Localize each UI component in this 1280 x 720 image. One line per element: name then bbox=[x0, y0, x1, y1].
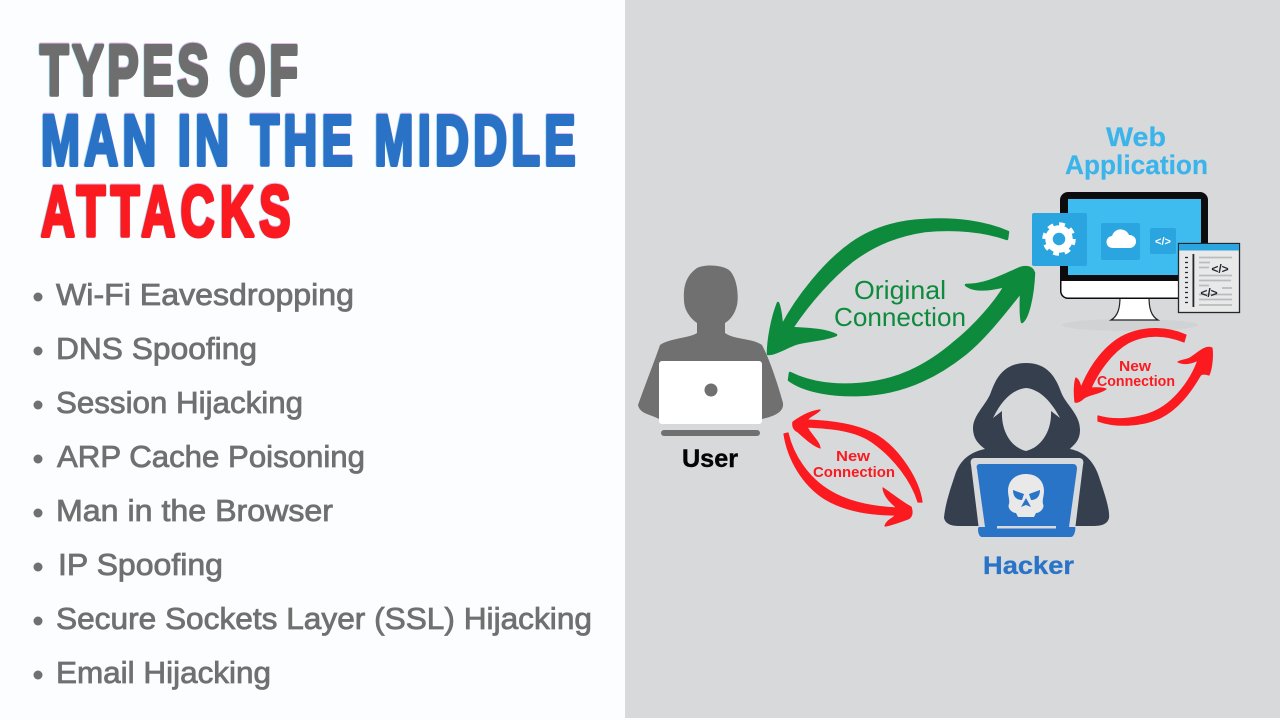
list of attack types: Session Hijacking bbox=[56, 385, 303, 420]
heading: web application: Application bbox=[1065, 150, 1208, 180]
list of attack types: Secure Sockets Layer (SSL) Hijacking bbox=[56, 601, 592, 636]
icon: code panel: </> bbox=[1155, 236, 1171, 248]
title: ATTACKS bbox=[41, 172, 290, 251]
label: new connection, left bbox=[813, 448, 895, 481]
arrow: red new connection, hacker to user bbox=[793, 410, 922, 502]
icon: cloud panel bbox=[1101, 223, 1140, 260]
title: TYPES OF bbox=[40, 31, 298, 110]
icon: user with laptop bbox=[638, 266, 783, 436]
icon: code panel bbox=[1150, 228, 1176, 254]
icon: skull bbox=[1008, 474, 1044, 517]
label: original connection: Original bbox=[854, 275, 946, 305]
label: user: User bbox=[682, 445, 738, 473]
arrow: green original connection, web application to user bbox=[768, 220, 1008, 354]
heading: web application: Web bbox=[1106, 122, 1166, 152]
arrow: red new connection, user to hacker bbox=[784, 433, 912, 526]
icon: code document: </> bbox=[1211, 262, 1229, 276]
icon: code document bbox=[1178, 244, 1240, 312]
label: new connection, left: New bbox=[836, 448, 870, 465]
panel: left background bbox=[0, 0, 625, 720]
label: original connection: Connection bbox=[834, 302, 966, 332]
label: original connection bbox=[834, 275, 966, 332]
list of attack types: DNS Spoofing bbox=[56, 331, 257, 366]
list of attack types: Email Hijacking bbox=[56, 655, 271, 690]
list of attack types: IP Spoofing bbox=[58, 547, 223, 582]
arrow: red new connection, web application to hacker bbox=[1074, 329, 1186, 402]
arrow: green original connection, user to web application bbox=[789, 267, 1034, 395]
icon: web application monitor bbox=[1032, 192, 1240, 331]
icon: gear panel bbox=[1032, 213, 1087, 266]
list of attack types bbox=[34, 277, 592, 690]
title bbox=[40, 31, 576, 251]
title: MAN IN THE MIDDLE bbox=[41, 101, 576, 180]
list of attack types: Wi-Fi Eavesdropping bbox=[56, 277, 354, 312]
icon: hacker with laptop bbox=[944, 363, 1109, 540]
list of attack types: Man in the Browser bbox=[56, 493, 333, 528]
label: new connection, right: Connection bbox=[1097, 374, 1175, 390]
panel: right background bbox=[625, 0, 1280, 718]
arrow: red new connection, hacker to web application bbox=[1098, 347, 1212, 425]
icon: code document: </> bbox=[1200, 286, 1218, 300]
label: new connection, left: Connection bbox=[813, 464, 895, 481]
list of attack types: ARP Cache Poisoning bbox=[57, 439, 365, 474]
heading: web application bbox=[1065, 122, 1208, 180]
label: new connection, right bbox=[1097, 359, 1175, 390]
label: new connection, right: New bbox=[1119, 359, 1152, 375]
label: hacker: Hacker bbox=[983, 552, 1074, 580]
